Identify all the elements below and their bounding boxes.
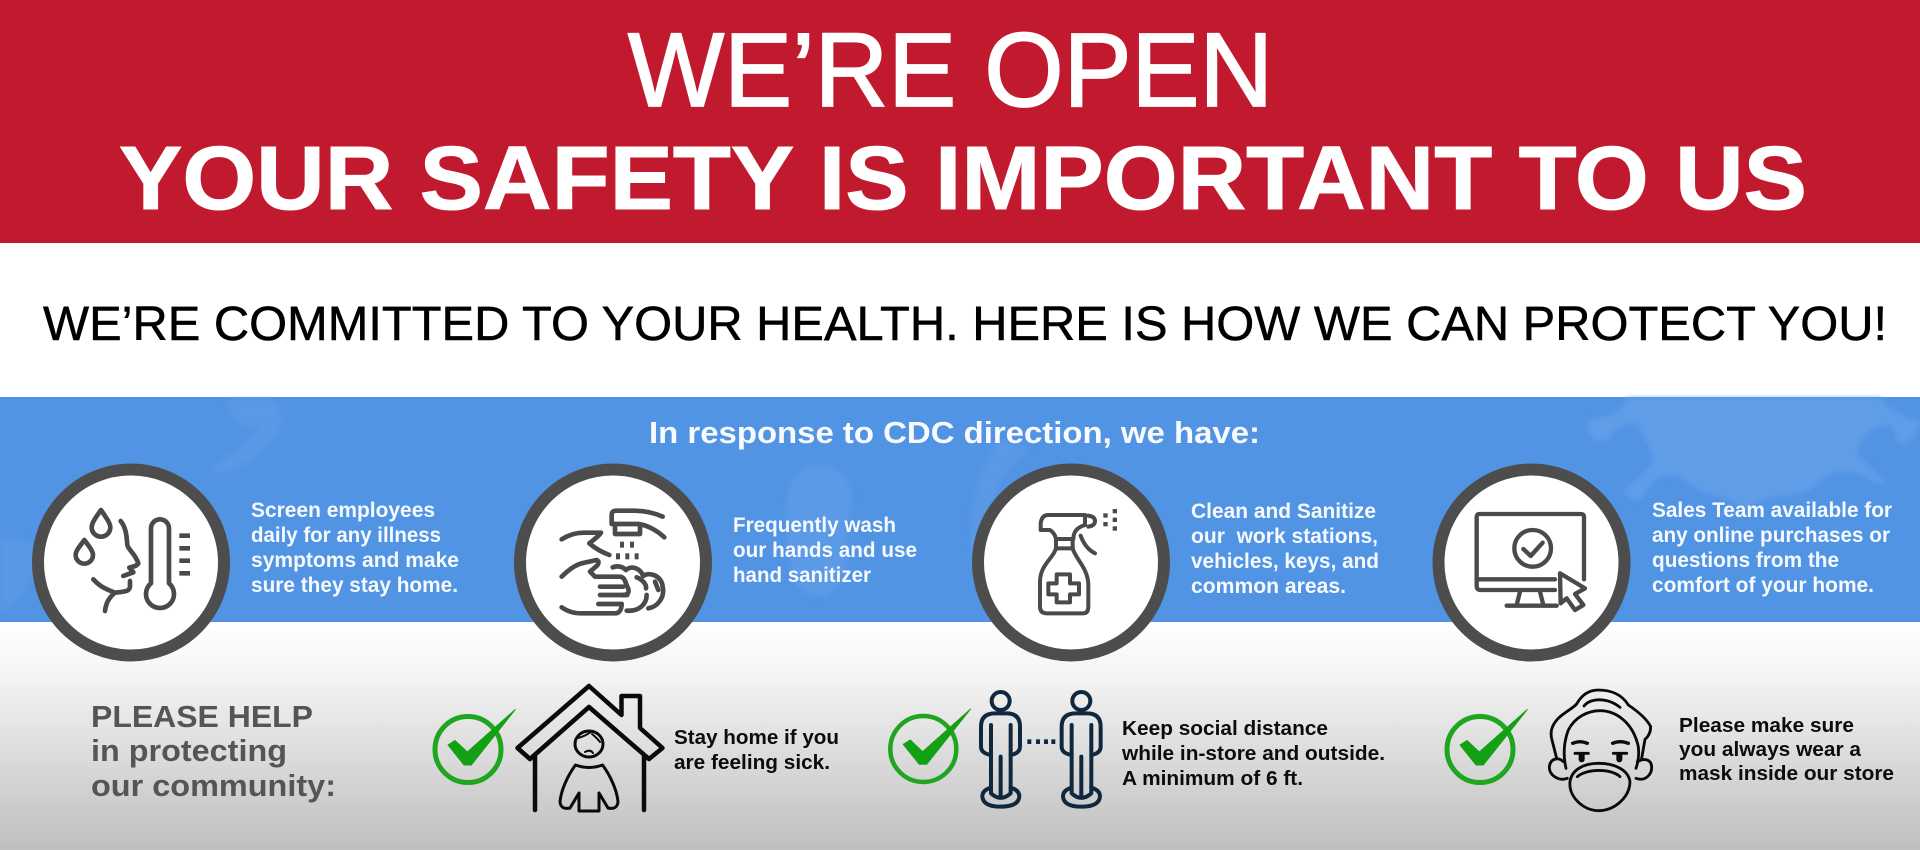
- text: social distance: while in-store and outside.: [1121, 743, 1385, 765]
- text: please help: our community:: [91, 768, 336, 803]
- text: social distance: Keep social distance: [1122, 718, 1328, 740]
- heading: your safety is important to us: YOUR SAFETY IS IMPORTANT TO US: [119, 129, 1807, 229]
- panel: commitment strip: [0, 243, 1920, 398]
- panel: blue CDC band: [0, 397, 1920, 622]
- text: wash hands: hand sanitizer: [733, 564, 871, 587]
- item: social distance: [890, 692, 1385, 807]
- icon: green check: [890, 709, 971, 782]
- icon ring: screening: [38, 470, 224, 656]
- text: please help: [91, 699, 336, 803]
- heading: in response to CDC direction: In response to CDC direction, we have:: [649, 415, 1260, 450]
- icon: green check: [435, 710, 515, 782]
- panel: gray community band: [0, 622, 1920, 850]
- text: screen employees: daily for any illness: [251, 524, 441, 547]
- text: wear mask: Please make sure: [1679, 715, 1854, 737]
- text: clean and sanitize: [1191, 500, 1379, 598]
- subheading: commitment statement: WE’RE COMMITTED TO YOUR HEALTH. HERE IS HOW WE CAN PROTECT YOU!: [43, 298, 1887, 351]
- text: screen employees: [251, 499, 459, 597]
- text: stay home: are feeling sick.: [674, 752, 830, 774]
- icon: green check: [1447, 710, 1527, 782]
- text: sales team: Sales Team available for: [1652, 499, 1892, 522]
- icon: face with mask: [1549, 690, 1652, 811]
- item: sales team: [1438, 470, 1892, 656]
- item: stay home: [435, 686, 839, 811]
- background: faint virus shapes: [0, 398, 1920, 612]
- text: please help: in protecting: [91, 733, 287, 768]
- text: wash hands: Frequently wash: [733, 514, 896, 537]
- text: social distance: A minimum of 6 ft.: [1122, 768, 1303, 790]
- icon: house with person: [518, 686, 662, 811]
- text: sales team: questions from the: [1652, 549, 1839, 572]
- icon: washing hands: [562, 511, 664, 613]
- icon: face and thermometer: [76, 510, 190, 611]
- text: wash hands: our hands and use: [733, 539, 917, 562]
- text: sales team: [1652, 499, 1892, 597]
- text: wear mask: [1679, 715, 1894, 785]
- text: screen employees: symptoms and make: [251, 549, 459, 572]
- icon ring: online sales: [1438, 470, 1624, 656]
- text: stay home: [674, 727, 839, 774]
- text: sales team: comfort of your home.: [1652, 574, 1874, 597]
- icon: spray bottle: [1040, 509, 1117, 613]
- icon ring: hand washing: [520, 470, 706, 656]
- text: clean and sanitize: vehicles, keys, and: [1191, 550, 1379, 573]
- icon: monitor and cursor: [1477, 514, 1585, 610]
- text: wear mask: you always wear a: [1679, 739, 1862, 761]
- item: wear mask: [1447, 690, 1894, 811]
- text: screen employees: Screen employees: [251, 499, 435, 522]
- text: wash hands: [733, 514, 917, 587]
- text: clean and sanitize: Clean and Sanitize: [1191, 500, 1376, 523]
- text: clean and sanitize: our work stations,: [1191, 525, 1378, 548]
- item: screen employees: [38, 470, 459, 656]
- icon ring: sanitizing: [978, 470, 1164, 656]
- text: screen employees: sure they stay home.: [251, 574, 458, 597]
- text: sales team: any online purchases or: [1652, 524, 1890, 547]
- item: wash hands: [520, 470, 917, 656]
- text: social distance: [1121, 718, 1385, 790]
- item: clean and sanitize: [978, 470, 1379, 656]
- text: stay home: Stay home if you: [674, 727, 839, 749]
- title: we're open: WE’RE OPEN: [628, 12, 1273, 129]
- panel: red header: [0, 0, 1920, 243]
- text: clean and sanitize: common areas.: [1191, 575, 1346, 598]
- icon: two people apart: [981, 692, 1101, 807]
- text: please help: PLEASE HELP: [91, 699, 313, 734]
- text: wear mask: mask inside our store: [1679, 763, 1894, 785]
